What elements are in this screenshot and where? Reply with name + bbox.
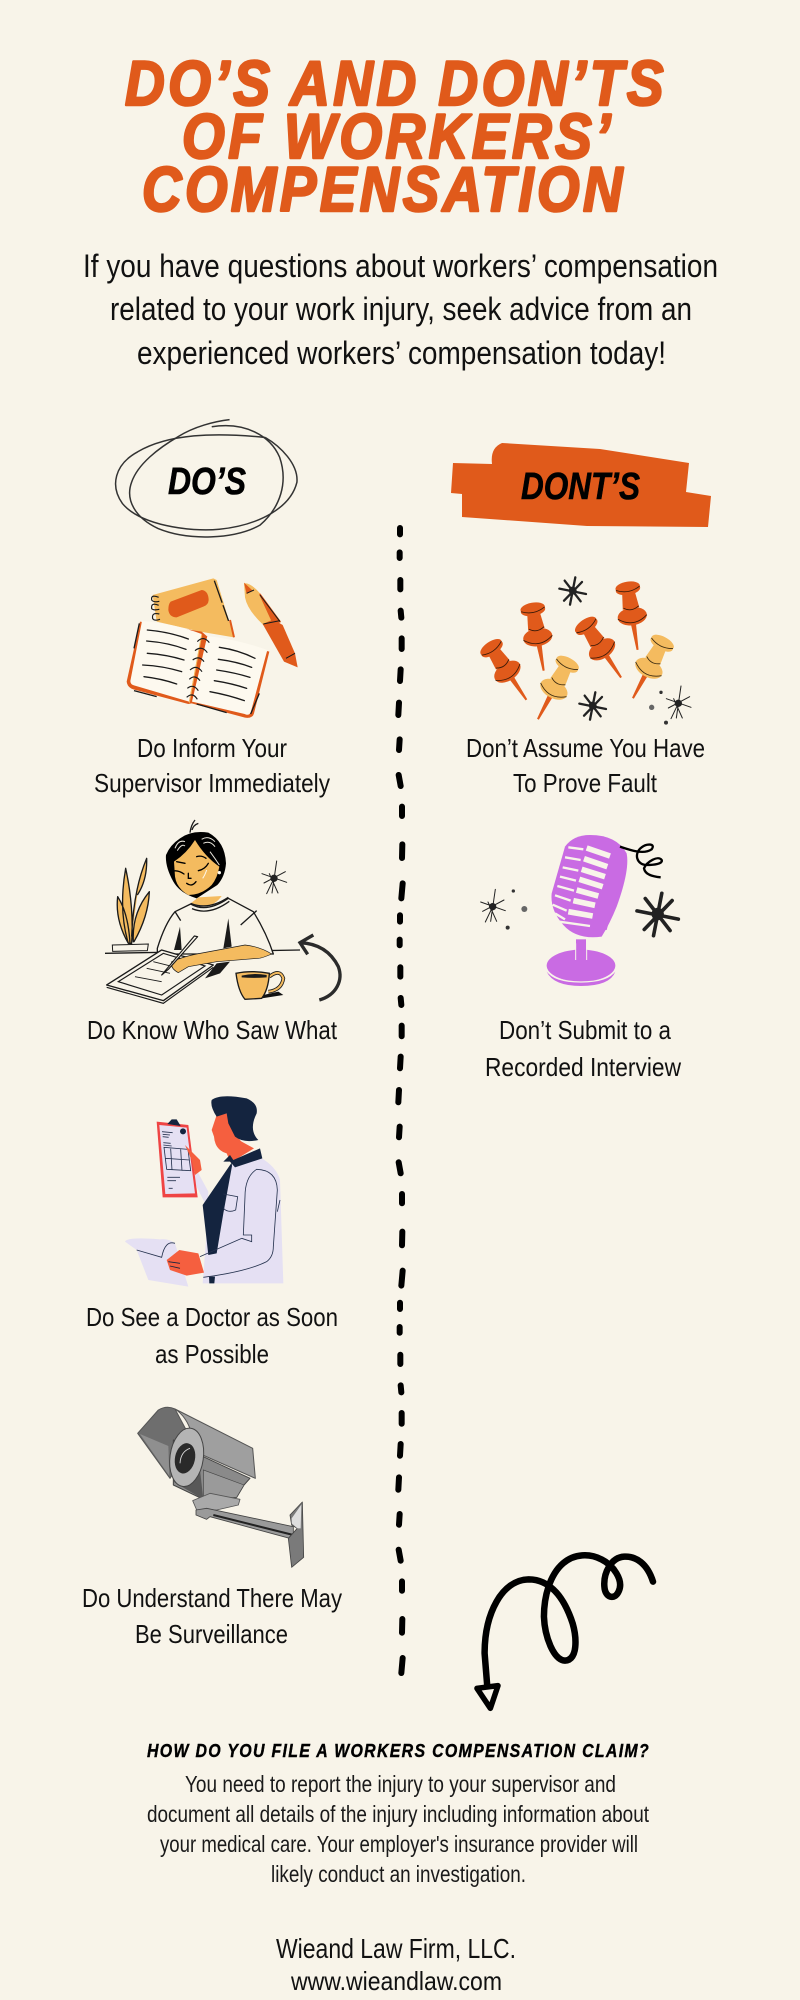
caption: do understand: Do Understand There May bbox=[82, 1583, 342, 1613]
caption: don't submit: Don’t Submit to a bbox=[499, 1015, 671, 1045]
text: filing explanation: your medical care. Your employer's insurance provider will bbox=[160, 1831, 638, 1857]
curl bbox=[620, 845, 662, 877]
caption: do inform: Supervisor Immediately bbox=[94, 768, 330, 798]
face and hair bbox=[212, 1113, 254, 1163]
caption: don't assume: To Prove Fault bbox=[513, 768, 658, 798]
tie bbox=[203, 1163, 232, 1255]
heading: how to file: HOW DO YOU FILE A WORKERS COMPENSATION CLAIM? bbox=[147, 1741, 650, 1761]
icon: push pins bbox=[476, 577, 691, 726]
paper and hand bbox=[125, 1238, 188, 1287]
arrow: looping down bbox=[477, 1555, 653, 1708]
heading: do's with scribbled circle: DO’S bbox=[168, 461, 246, 503]
caption: do see bbox=[86, 1302, 338, 1369]
caption: don't submit: Recorded Interview bbox=[485, 1052, 681, 1082]
footer: firm name and website: www.wieandlaw.com bbox=[290, 1966, 502, 1996]
shirt bbox=[157, 898, 273, 954]
text: filing explanation: document all details of the injury including information about bbox=[147, 1801, 650, 1827]
caption: do see: Do See a Doctor as Soon bbox=[86, 1302, 338, 1332]
title: COMPENSATION bbox=[142, 155, 626, 225]
icon: doctor with clipboard bbox=[125, 1096, 283, 1287]
caption: do understand: Be Surveillance bbox=[135, 1619, 288, 1649]
heading: don'ts with orange brush bbox=[451, 443, 711, 527]
shirt lines bbox=[200, 1169, 280, 1277]
caption: do inform: Do Inform Your bbox=[137, 733, 287, 763]
footer: firm name and website: Wieand Law Firm, LLC. bbox=[276, 1933, 516, 1964]
footer: firm name and website bbox=[276, 1933, 516, 1996]
icon: microphone bbox=[481, 835, 678, 986]
caption: do see: as Possible bbox=[155, 1339, 269, 1369]
intro text bbox=[83, 248, 718, 371]
curved arrow bbox=[300, 935, 340, 1000]
heading: don'ts with orange brush: DONT’S bbox=[521, 466, 640, 508]
title bbox=[125, 49, 667, 225]
caption: do understand bbox=[82, 1583, 342, 1649]
intro text: If you have questions about workers’ compensation bbox=[83, 248, 718, 284]
tablet bbox=[107, 950, 213, 1001]
caption: don't assume bbox=[466, 733, 705, 798]
intro text: experienced workers’ compensation today! bbox=[137, 335, 666, 371]
icon: person writing at desk bbox=[105, 820, 340, 1003]
text: filing explanation: You need to report the injury to your supervisor and bbox=[185, 1771, 616, 1797]
dashed divider bbox=[398, 528, 403, 1673]
caption: don't submit bbox=[485, 1015, 681, 1082]
caption: don't assume: Don’t Assume You Have bbox=[466, 733, 705, 763]
caption: do know: Do Know Who Saw What bbox=[87, 1015, 338, 1045]
heading: do's with scribbled circle bbox=[116, 420, 297, 537]
cup bbox=[262, 992, 283, 998]
icon: security camera bbox=[138, 1407, 304, 1567]
icon: notebook and pen bbox=[127, 578, 298, 718]
caption: do inform bbox=[94, 733, 330, 798]
intro text: related to your work injury, seek advice from an bbox=[110, 291, 692, 327]
text: filing explanation: likely conduct an investigation. bbox=[271, 1861, 526, 1887]
arm bbox=[171, 945, 272, 973]
clipboard bbox=[157, 1122, 198, 1197]
shirt bbox=[192, 1157, 283, 1283]
head bbox=[166, 832, 226, 898]
plant bbox=[112, 858, 149, 951]
text: filing explanation bbox=[147, 1771, 650, 1887]
sparkle bbox=[262, 861, 287, 894]
title: DO’S AND DON’TS bbox=[125, 49, 667, 119]
title: OF WORKERS’ bbox=[182, 102, 614, 172]
